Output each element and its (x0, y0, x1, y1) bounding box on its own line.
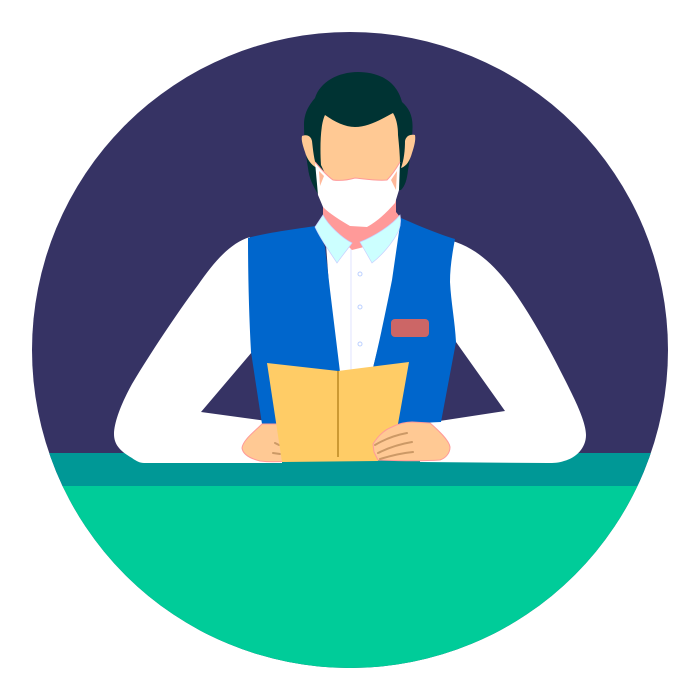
shirt buttons (358, 272, 362, 346)
left fingers (273, 443, 280, 454)
shirt (325, 230, 400, 372)
left hand (242, 424, 288, 462)
right ear (401, 135, 415, 168)
right arm (420, 238, 586, 463)
vest left (248, 226, 340, 430)
person (114, 72, 586, 463)
shirt placket line (350, 246, 352, 372)
neck (323, 200, 400, 250)
fingers (375, 433, 413, 459)
left ear (302, 135, 317, 168)
right hand (373, 422, 450, 461)
left arm (114, 237, 282, 463)
menu (267, 362, 409, 462)
menu spine (337, 371, 339, 457)
table edge band (49, 453, 651, 486)
vest right (372, 218, 456, 424)
table front (62, 486, 638, 668)
name badge (391, 319, 429, 337)
face (320, 113, 400, 184)
mask (315, 162, 400, 227)
table (49, 453, 651, 668)
hair (304, 72, 413, 194)
collar (315, 215, 401, 263)
